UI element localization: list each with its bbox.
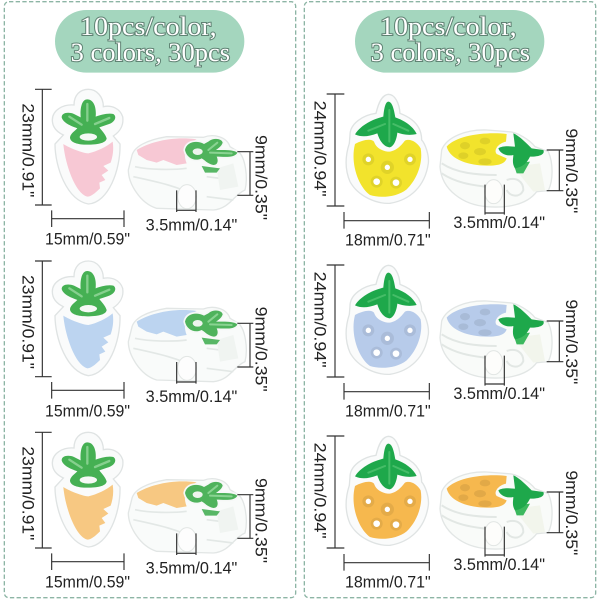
bead row: blue carrot: 23mm/0.91"	[19, 275, 38, 369]
bead row: orange strawberry: 18mm/0.71"	[345, 573, 431, 592]
bead row: orange carrot: 23mm/0.91"	[19, 446, 38, 540]
bead row: orange strawberry: 24mm/0.94"	[311, 443, 330, 539]
bead row: blue carrot: 3.5mm/0.14"	[146, 387, 237, 406]
bead row: orange strawberry: 3.5mm/0.14"	[453, 555, 545, 574]
bead row: orange strawberry: 9mm/0.35"	[562, 470, 581, 555]
bead row: yellow strawberry: 3.5mm/0.14"	[453, 213, 545, 232]
bead row: blue strawberry: 3.5mm/0.14"	[453, 384, 545, 403]
bead row: pink carrot	[19, 89, 270, 249]
bead row: pink carrot: 15mm/0.59"	[45, 230, 130, 249]
panel: carrot beads	[4, 2, 296, 598]
bead row: orange carrot	[19, 432, 270, 592]
badge: strawberry quantity: 3 colors, 30pcs	[371, 37, 530, 67]
bead row: orange strawberry	[311, 436, 581, 592]
badge: strawberry quantity	[355, 10, 544, 73]
bead row: pink carrot: 23mm/0.91"	[19, 103, 38, 197]
bead row: blue carrot	[19, 261, 270, 420]
bead row: yellow strawberry: 9mm/0.35"	[562, 128, 581, 213]
bead row: pink carrot: 3.5mm/0.14"	[146, 215, 237, 234]
bead row: yellow strawberry	[311, 94, 581, 250]
bead row: blue carrot: 15mm/0.59"	[45, 401, 130, 420]
bead row: blue carrot: 9mm/0.35"	[251, 307, 270, 392]
bead row: pink carrot: 9mm/0.35"	[251, 135, 270, 220]
badge: carrot quantity: 3 colors, 30pcs	[71, 37, 230, 67]
panel: strawberry beads	[304, 2, 596, 598]
bead row: blue strawberry	[311, 265, 581, 421]
bead row: yellow strawberry: 24mm/0.94"	[311, 101, 330, 197]
bead row: blue strawberry: 18mm/0.71"	[345, 402, 431, 421]
bead row: blue strawberry: 24mm/0.94"	[311, 272, 330, 368]
bead row: orange carrot: 3.5mm/0.14"	[146, 558, 237, 577]
bead row: blue strawberry: 9mm/0.35"	[562, 299, 581, 384]
bead row: orange carrot: 9mm/0.35"	[251, 478, 270, 563]
badge: carrot quantity	[55, 10, 244, 73]
badge: strawberry quantity: 10pcs/color,	[380, 11, 517, 41]
badge: carrot quantity: 10pcs/color,	[80, 11, 217, 41]
bead row: orange carrot: 15mm/0.59"	[45, 573, 130, 592]
bead row: yellow strawberry: 18mm/0.71"	[345, 231, 431, 250]
